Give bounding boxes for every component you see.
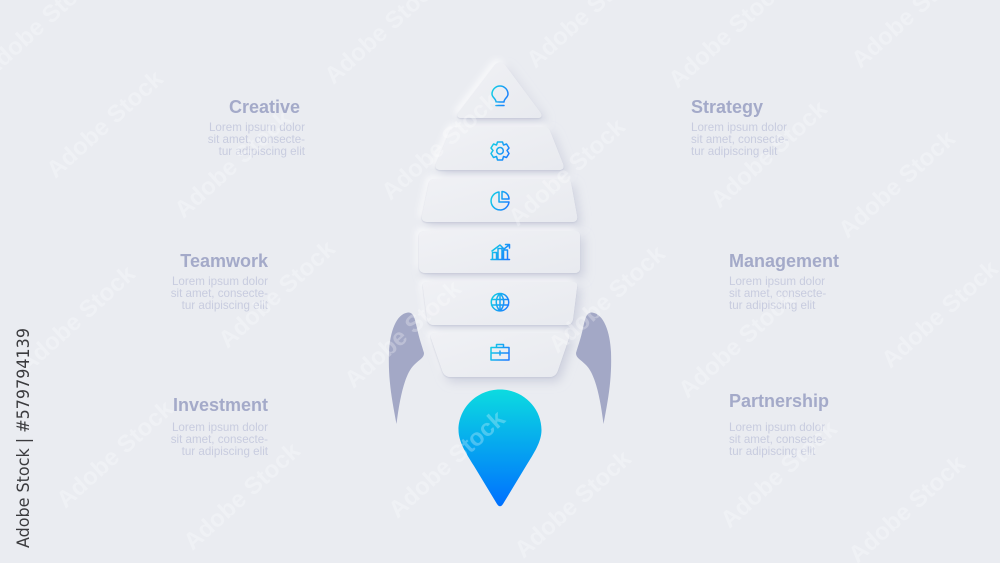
left fin xyxy=(389,312,424,424)
stock id caption: Adobe Stock | #579794139 xyxy=(14,328,33,548)
icon: briefcase xyxy=(491,344,509,360)
segment 2 xyxy=(436,127,564,170)
stock watermarks: Adobe Stock xyxy=(383,405,511,524)
label: Strategy xyxy=(691,97,788,158)
stock watermarks: Adobe Stock xyxy=(705,95,833,214)
icon: globe xyxy=(491,293,509,311)
label: Investment: Lorem ipsum dolor xyxy=(172,421,268,434)
label: Strategy: tur adipiscing elit xyxy=(691,145,778,158)
stock watermarks: Adobe Stock xyxy=(169,105,297,224)
icon: light bulb xyxy=(492,86,508,106)
label: Teamwork: Lorem ipsum dolor xyxy=(172,275,268,288)
label: Strategy: Strategy xyxy=(691,97,763,117)
label: Teamwork: tur adipiscing elit xyxy=(182,299,269,312)
segment 4 xyxy=(419,231,580,273)
label: Creative: tur adipiscing elit xyxy=(219,145,306,158)
flame xyxy=(458,390,542,506)
stock watermarks: Adobe Stock xyxy=(13,260,141,379)
label: Teamwork: Teamwork xyxy=(180,251,269,271)
label: Management: sit amet, consecte- xyxy=(729,287,826,300)
stock watermarks: Adobe Stock xyxy=(41,65,169,184)
label: Partnership: Lorem ipsum dolor xyxy=(729,421,825,434)
label: Investment xyxy=(171,395,269,458)
label: Strategy: sit amet, consecte- xyxy=(691,133,788,146)
label: Strategy: Lorem ipsum dolor xyxy=(691,121,787,134)
stock watermarks: Adobe Stock xyxy=(503,113,631,232)
stock watermarks: Adobe Stock xyxy=(376,87,504,206)
stock watermarks: Adobe Stock xyxy=(51,395,179,514)
label: Management: Management xyxy=(729,251,839,271)
label: Partnership: Partnership xyxy=(729,391,829,411)
label: Teamwork: sit amet, consecte- xyxy=(171,287,268,300)
stock watermarks: Adobe Stock xyxy=(213,235,341,354)
icon: pie chart xyxy=(491,192,509,210)
label: Partnership: tur adipiscing elit xyxy=(729,445,816,458)
label: Teamwork xyxy=(171,251,269,312)
label: Creative: sit amet, consecte- xyxy=(208,133,305,146)
label: Investment: tur adipiscing elit xyxy=(182,445,269,458)
segment 6 xyxy=(431,333,569,377)
stock watermarks: Adobe Stock xyxy=(715,415,843,534)
stock watermarks: Adobe Stock xyxy=(178,437,306,556)
stock watermarks: Adobe Stock xyxy=(876,255,1000,374)
stock watermarks: Adobe Stock xyxy=(673,285,801,404)
label: Creative: Creative xyxy=(229,97,300,117)
segment 5 xyxy=(423,282,577,325)
stock watermarks: Adobe Stock xyxy=(509,445,637,563)
label: Investment: sit amet, consecte- xyxy=(171,433,268,446)
stock watermarks: Adobe Stock xyxy=(339,275,467,394)
stock watermarks: Adobe Stock xyxy=(833,125,961,244)
label: Partnership xyxy=(729,391,829,458)
label: Management xyxy=(729,251,839,312)
segment 3 xyxy=(422,179,577,222)
icon: bar chart with arrow xyxy=(491,244,510,260)
icon: gear xyxy=(491,142,509,160)
rocket body xyxy=(419,62,580,377)
right fin xyxy=(576,312,611,424)
label: Management: Lorem ipsum dolor xyxy=(729,275,825,288)
label: Management: tur adipiscing elit xyxy=(729,299,816,312)
stock watermarks: Adobe Stock xyxy=(543,240,671,359)
label: Creative: Lorem ipsum dolor xyxy=(209,121,305,134)
label: Creative xyxy=(208,97,306,158)
segment 1: nose cone xyxy=(458,62,541,118)
label: Investment: Investment xyxy=(173,395,268,415)
label: Partnership: sit amet, consecte- xyxy=(729,433,826,446)
